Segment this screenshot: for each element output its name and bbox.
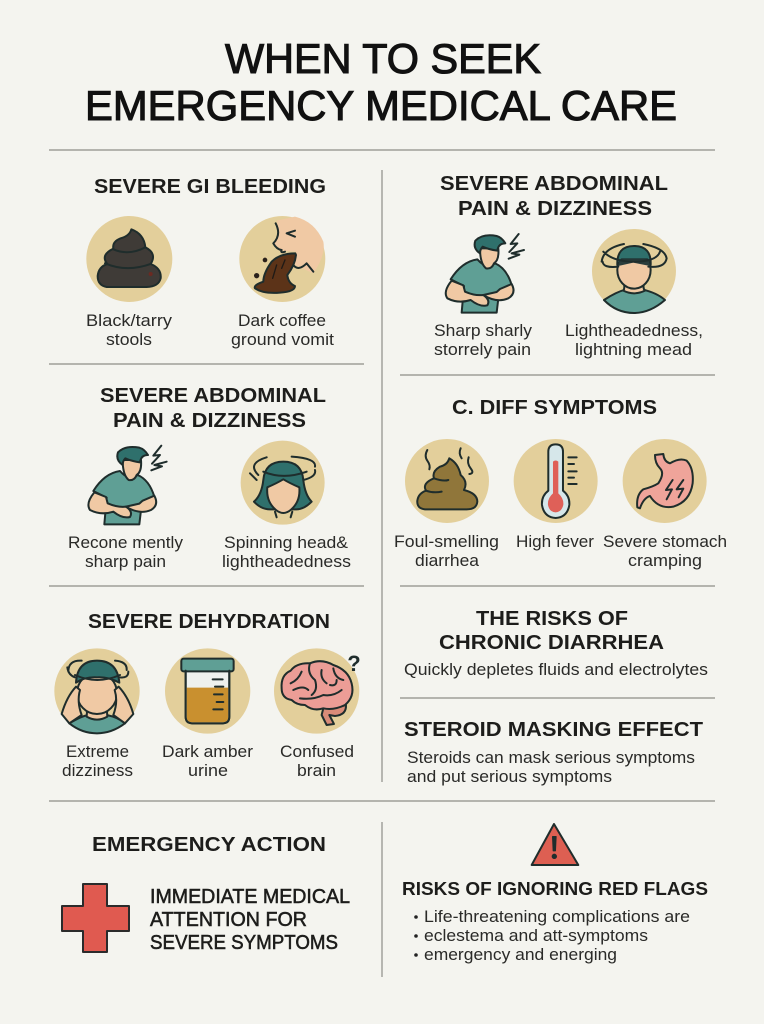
label: black tarry stools: stools xyxy=(106,330,152,349)
heading: risks of ignoring red flags: RISKS OF IGNORING RED FLAGS xyxy=(402,878,708,899)
label: dark coffee ground vomit xyxy=(231,311,334,349)
label: sharp pain xyxy=(434,321,533,359)
text: steroid description: Steroids can mask serious symptoms xyxy=(407,748,695,767)
heading: severe GI bleeding: SEVERE GI BLEEDING xyxy=(94,175,326,198)
label: foul-smelling diarrhea xyxy=(394,532,499,570)
heading: severe abdominal pain and dizziness, right xyxy=(440,172,668,220)
heading: emergency action: EMERGENCY ACTION xyxy=(92,833,326,856)
panel: risks of ignoring red flags xyxy=(402,824,708,964)
label: spinning head and lightheadedness: Spinning head& xyxy=(224,533,349,552)
panel: severe abdominal pain and dizziness, left xyxy=(68,384,351,571)
heading: severe abdominal pain and dizziness, right: PAIN & DIZZINESS xyxy=(458,197,652,220)
icon: woman with spinning head xyxy=(241,441,325,525)
heading: severe dehydration: SEVERE DEHYDRATION xyxy=(88,610,330,633)
label: confused brain xyxy=(280,742,354,780)
heading: risks of chronic diarrhea: THE RISKS OF xyxy=(476,607,628,630)
label: severe stomach cramping: cramping xyxy=(628,551,702,570)
label: sharp pain: storrely pain xyxy=(434,340,531,359)
label: lightheadedness xyxy=(565,321,703,359)
panel: C. diff symptoms xyxy=(394,396,727,570)
label: extreme dizziness xyxy=(62,742,133,780)
label: dark coffee ground vomit: Dark coffee xyxy=(238,311,326,330)
icon: person with stomach pain xyxy=(446,234,524,313)
list: risks: Life-threatening complications are xyxy=(424,907,690,926)
panel: severe dehydration xyxy=(54,610,361,780)
icon: warning triangle xyxy=(532,824,578,865)
text: steroid description: and put serious symptoms xyxy=(407,767,612,786)
label: black tarry stools: Black/tarry xyxy=(86,311,173,330)
label: dark amber urine xyxy=(162,742,253,780)
label: sharp pain, left xyxy=(68,533,184,571)
icon: confused brain xyxy=(274,648,361,734)
list: risks: eclestema and att-symptoms xyxy=(424,926,648,945)
panel: severe abdominal pain and dizziness, right xyxy=(434,172,703,359)
label: sharp pain, left: sharp pain xyxy=(85,552,166,571)
label: sharp pain: Sharp sharly xyxy=(434,321,533,340)
icon: dark amber urine jar xyxy=(165,648,250,734)
panel: severe GI bleeding xyxy=(86,175,334,349)
heading: C. diff symptoms: C. DIFF SYMPTOMS xyxy=(452,396,657,419)
label: foul-smelling diarrhea: Foul-smelling xyxy=(394,532,499,551)
label: foul-smelling diarrhea: diarrhea xyxy=(415,551,480,570)
label: severe stomach cramping xyxy=(603,532,727,570)
title xyxy=(85,35,677,129)
text: chronic diarrhea description: Quickly depletes fluids and electrolytes xyxy=(404,660,708,679)
list: risks xyxy=(414,907,690,964)
heading: severe abdominal pain and dizziness, left: PAIN & DIZZINESS xyxy=(113,409,306,432)
list: risks: emergency and energing xyxy=(424,945,617,964)
label: extreme dizziness: Extreme xyxy=(66,742,129,761)
heading: severe abdominal pain and dizziness, left xyxy=(100,384,326,432)
icon: red cross xyxy=(62,884,129,952)
icon: person with sharp pain xyxy=(88,446,167,524)
icon: black tarry stool xyxy=(86,216,172,302)
title: WHEN TO SEEK xyxy=(225,35,541,82)
heading: risks of chronic diarrhea: CHRONIC DIARRHEA xyxy=(439,631,664,654)
icon: confused brain: ? xyxy=(347,651,361,676)
panel: steroid masking effect xyxy=(404,718,703,786)
label: sharp pain, left: Recone mently xyxy=(68,533,184,552)
icon: thermometer xyxy=(514,439,598,523)
text: immediate medical attention xyxy=(150,886,350,954)
heading: risks of chronic diarrhea xyxy=(439,607,664,654)
icon: person with spinning head xyxy=(592,229,676,313)
label: spinning head and lightheadedness: lightheadedness xyxy=(222,552,351,571)
heading: steroid masking effect: STEROID MASKING EFFECT xyxy=(404,718,703,741)
text: immediate medical attention: ATTENTION FOR xyxy=(150,909,307,931)
icon: cramping stomach xyxy=(623,439,707,523)
text: immediate medical attention: IMMEDIATE MEDICAL xyxy=(150,886,350,908)
label: high fever: High fever xyxy=(516,532,594,551)
label: dark amber urine: Dark amber xyxy=(162,742,253,761)
panel: emergency action xyxy=(62,833,350,954)
title: EMERGENCY MEDICAL CARE xyxy=(85,82,677,129)
text: immediate medical attention: SEVERE SYMPTOMS xyxy=(150,932,338,954)
label: black tarry stools xyxy=(86,311,173,349)
text: steroid description xyxy=(407,748,695,786)
label: confused brain: Confused xyxy=(280,742,354,761)
icon: extreme dizziness xyxy=(54,648,140,734)
label: lightheadedness: Lightheadedness, xyxy=(565,321,703,340)
heading: severe abdominal pain and dizziness, left: SEVERE ABDOMINAL xyxy=(100,384,326,407)
label: dark coffee ground vomit: ground vomit xyxy=(231,330,334,349)
label: lightheadedness: lightning mead xyxy=(575,340,692,359)
label: confused brain: brain xyxy=(297,761,336,780)
label: spinning head and lightheadedness xyxy=(222,533,351,571)
icon: coffee ground vomit xyxy=(239,216,325,302)
label: dark amber urine: urine xyxy=(188,761,228,780)
label: extreme dizziness: dizziness xyxy=(62,761,133,780)
heading: severe abdominal pain and dizziness, right: SEVERE ABDOMINAL xyxy=(440,172,668,195)
icon: foul-smelling stool xyxy=(405,439,489,523)
panel: risks of chronic diarrhea xyxy=(404,607,708,679)
label: severe stomach cramping: Severe stomach xyxy=(603,532,727,551)
